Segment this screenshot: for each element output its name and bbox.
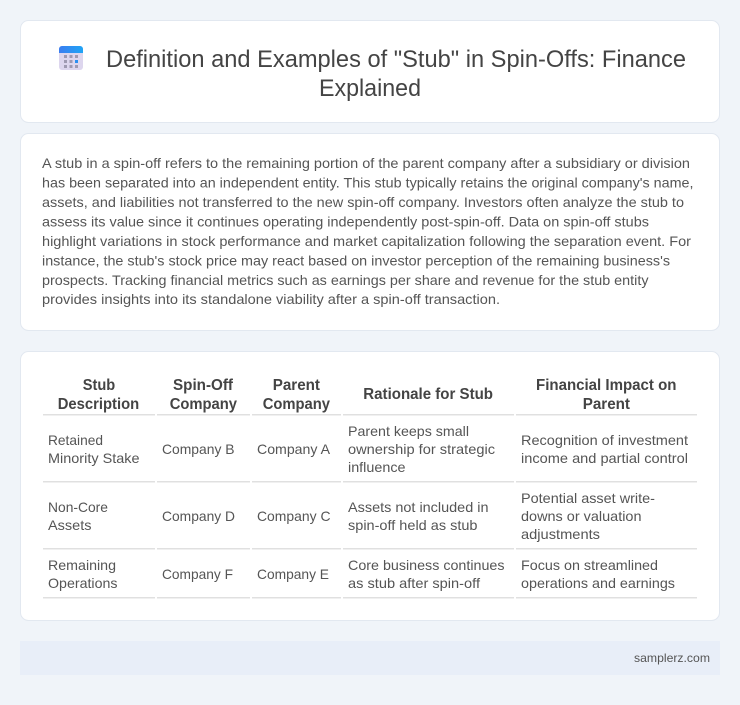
text block: stub explanation: has been separated into an independent entity. This stub typically retains the original company's name, [42, 174, 694, 190]
table header row: Parent [273, 377, 321, 394]
table header row: Description [58, 396, 139, 413]
title [106, 46, 686, 102]
table row: non-core assets: Potential asset write- [521, 490, 655, 506]
text block: stub explanation: provides insights into its standalone viability after a spin-off transaction. [42, 291, 500, 307]
table header row: Spin-Off [173, 377, 234, 394]
text block: stub explanation: assets, and liabilities not transferred to the new spin-off company. Investors often analyze the stub to [42, 194, 684, 210]
icon: calendar [59, 46, 83, 70]
table header row: Financial Impact on [536, 377, 676, 394]
title: Definition and Examples of "Stub" in Spin-Offs: Finance [106, 46, 686, 73]
table header row: Company [263, 396, 330, 413]
table row: retained minority stake: Company B [162, 441, 234, 457]
table row: remaining operations: Remaining [48, 557, 116, 573]
title: Explained [319, 75, 421, 102]
table row: retained minority stake: Retained [48, 432, 103, 448]
table row: non-core assets: spin-off held as stub [348, 517, 478, 533]
table row: non-core assets: Company C [257, 508, 330, 524]
table row: non-core assets [48, 490, 655, 542]
table row: retained minority stake [48, 423, 688, 475]
table row: retained minority stake: Company A [257, 441, 331, 457]
table row: non-core assets: downs or valuation [521, 508, 642, 524]
table row: retained minority stake: Recognition of investment [521, 432, 688, 448]
table row: remaining operations: Operations [48, 575, 118, 591]
table header row [58, 377, 676, 413]
table row: retained minority stake: Minority Stake [48, 450, 140, 466]
table header row: Company [170, 396, 237, 413]
text block: stub explanation: prospects. Tracking financial metrics such as earnings per share and revenue for the stub entity [42, 272, 648, 288]
table row: remaining operations [48, 557, 675, 591]
panel: title header [20, 20, 720, 122]
table row: non-core assets: Assets [48, 517, 92, 533]
table row: remaining operations: Core business continues [348, 557, 504, 573]
table header row: Stub [83, 377, 115, 394]
table row: retained minority stake: income and partial control [521, 450, 688, 466]
panel: comparison table [20, 352, 720, 620]
table row: non-core assets: Company D [162, 508, 235, 524]
text block: stub explanation: highlight variations in stock performance and market capitalization following the separation event. For [42, 233, 691, 249]
table row: retained minority stake: ownership for strategic [348, 441, 495, 457]
text block: stub explanation: instance, the stub's stock price may react based on investor perception of the remaining business's [42, 252, 670, 268]
text block: stub explanation: A stub in a spin-off refers to the remaining portion of the parent company after a subsidiary or division [42, 155, 690, 171]
text block: stub explanation: assess its value since it continues operating independently post-spin-off. Data on spin-off stubs [42, 213, 649, 229]
table row: non-core assets: adjustments [521, 526, 600, 542]
footer source text: samplerz.com [634, 651, 710, 665]
text block: stub explanation [42, 155, 694, 307]
table row: remaining operations: Focus on streamlined [521, 557, 658, 573]
table row: remaining operations: Company E [257, 566, 329, 582]
table header row: Rationale for Stub [363, 386, 493, 403]
table row: retained minority stake: Parent keeps small [348, 423, 469, 439]
table row: non-core assets: Non-Core [48, 499, 108, 515]
table header row: Parent [583, 396, 631, 413]
table row: remaining operations: as stub after spin-off [348, 575, 480, 591]
footer bar [20, 641, 720, 675]
table row: remaining operations: operations and earnings [521, 575, 675, 591]
panel: definition paragraph [20, 134, 720, 330]
table row: retained minority stake: influence [348, 459, 406, 475]
table row: remaining operations: Company F [162, 566, 233, 582]
table row: non-core assets: Assets not included in [348, 499, 488, 515]
